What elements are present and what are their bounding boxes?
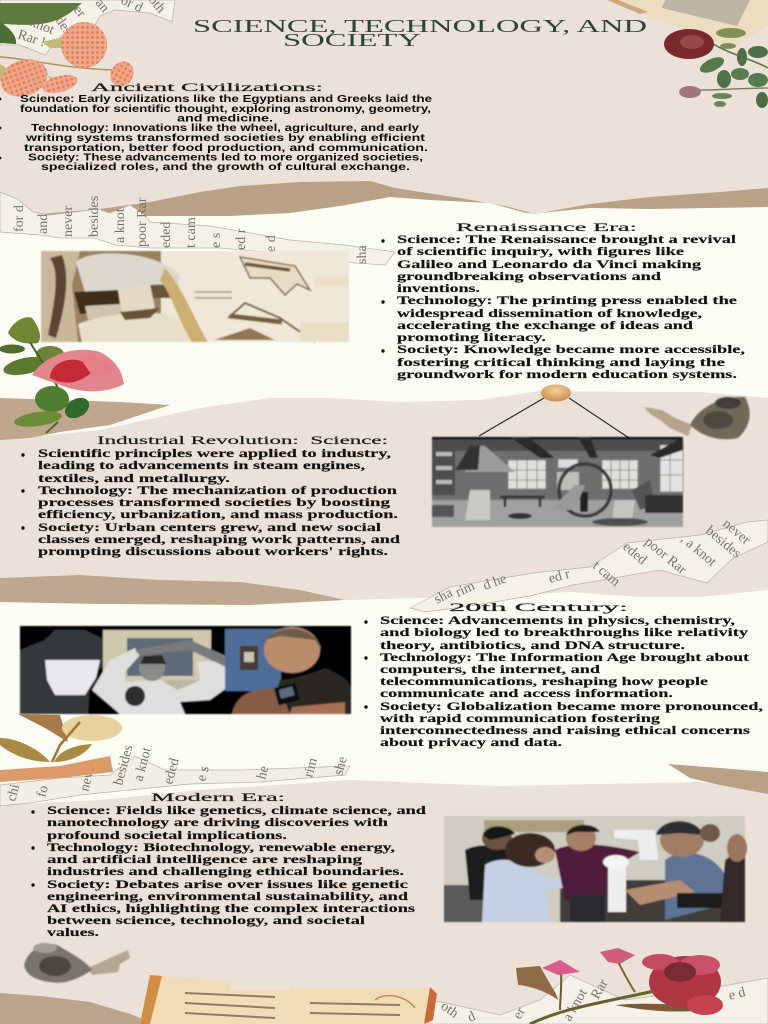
text block: Modern Era: engineering, environmental sustainability, and (47, 891, 409, 903)
newspaper strip: bottom right: e d (727, 985, 747, 1004)
text block: Renaissance Era: promoting literacy. (397, 332, 546, 344)
text block: Ancient Civilizations: foundation for scientific thought, exploring astronomy, geometry, (20, 104, 431, 115)
text block: Ancient Civilizations: Technology: Innovations like the wheel, agriculture, and early (31, 123, 420, 134)
text block: Modern Era: Society: Debates arise over issues like genetic (47, 879, 408, 891)
icon: rose with leaves (0, 317, 124, 433)
section: Industrial Revolution (21, 435, 401, 558)
text block: Renaissance Era (381, 234, 745, 381)
icon: dried flower with orange tape (0, 714, 122, 782)
newspaper strip: bottom right (345, 975, 768, 1024)
newspaper strip: under Ancient Civilizations: a knot (113, 208, 128, 243)
text block: Renaissance Era: Technology: The printing press enabled the (397, 295, 737, 307)
heading: Industrial Revolution: Industrial Revolution: Science: (97, 435, 388, 447)
text block: Modern Era: and artificial intelligence are reshaping (47, 854, 362, 866)
newspaper strip: above 20th Century: t cam (589, 559, 623, 590)
text block: Modern Era: between science, technology, and societal (47, 915, 365, 927)
text block: Renaissance Era: Society: Knowledge became more accessible, (397, 344, 745, 356)
text block: 20th Century: Science: Advancements in physics, chemistry, (380, 615, 735, 627)
text block: Renaissance Era: fostering critical thinking and laying the (397, 357, 725, 369)
text block: Industrial Revolution: Scientific principles were applied to industry, (38, 448, 391, 460)
icon: old open book bottom (140, 975, 437, 1024)
text block: Modern Era: nanotechnology are driving discoveries with (47, 817, 389, 829)
text block: Modern Era: Science: Fields like genetics, climate science, and (47, 805, 427, 817)
newspaper strip: bottom right: er (510, 1005, 529, 1022)
text block: Industrial Revolution: prompting discussions about workers' rights. (38, 546, 388, 558)
panel background: brown torn strip, Industrial (0, 398, 170, 440)
text block: Industrial Revolution: processes transformed societies by boosting (38, 497, 390, 509)
text block: Renaissance Era: accelerating the exchange of ideas and (397, 320, 694, 332)
text block: Modern Era: Technology: Biotechnology, renewable energy, (47, 842, 395, 854)
newspaper strip: above Modern Era (0, 743, 351, 806)
newspaper strip: above Modern Era: eded (161, 757, 183, 786)
text block: Renaissance Era: inventions. (397, 283, 480, 295)
newspaper strip: above Modern Era: fo (34, 784, 52, 799)
icon: top left orange flowers and leaves (0, 3, 138, 103)
text block: Industrial Revolution: textiles, and metallurgy. (38, 473, 230, 485)
icon: top right rose with leaves (664, 28, 768, 108)
newspaper strip: above Modern Era: she (331, 755, 351, 777)
newspaper strip: under Ancient Civilizations: for d (12, 205, 27, 232)
newspaper strip: under Ancient Civilizations: never (61, 206, 76, 237)
text block: Renaissance Era: groundbreaking observations and (397, 271, 662, 283)
bottom brown strip (0, 993, 155, 1024)
text block: Renaissance Era: of scientific inquiry, with figures like (397, 246, 684, 258)
image: 20th century technology collage (20, 626, 351, 714)
image: Leonardo da Vinci portrait and sketches (41, 251, 349, 342)
newspaper strip: above Modern Era: rim (301, 756, 321, 779)
text block: Industrial Revolution: leading to advancements in steam engines, (38, 460, 365, 472)
newspaper strip: under Ancient Civilizations: sha (355, 245, 370, 264)
newspaper strip: above 20th Century: poor Rar (641, 535, 689, 578)
text block: Industrial Revolution: Technology: The mechanization of production (38, 485, 398, 497)
text block: Modern Era: industries and challenging ethical boundaries. (47, 866, 404, 878)
image: modern robotics lab photo (444, 816, 747, 922)
text block: 20th Century: with rapid communication fostering (380, 713, 660, 725)
text block: 20th Century: and biology led to breakthroughs like relativity (380, 627, 748, 639)
newspaper strip: above Modern Era: e s (194, 764, 213, 783)
newspaper strip: above 20th Century: sha (432, 585, 456, 608)
heading: Ancient Civilizations: Ancient Civilizations: (91, 82, 323, 94)
newspaper strip: under Ancient Civilizations: besides (87, 196, 102, 237)
text block: Industrial Revolution: Society: Urban centers grew, and new social (38, 522, 381, 534)
text block: Renaissance Era: widespread dissemination of knowledge, (397, 308, 702, 320)
text block: 20th Century (364, 615, 763, 749)
newspaper strip: under Ancient Civilizations (0, 192, 395, 265)
text block: Renaissance Era: Science: The Renaissance brought a revival (397, 234, 736, 246)
section: Ancient Civilizations (0, 82, 433, 173)
newspaper strip: under Ancient Civilizations: t cam (184, 217, 199, 248)
newspaper strip: top left: Rar ! (16, 28, 47, 51)
icon: moth top right (644, 397, 750, 439)
text block: 20th Century: telecommunications, reshaping how people (380, 676, 708, 688)
newspaper strip: above 20th Century: besides (702, 524, 744, 562)
text block: Ancient Civilizations: writing systems transformed societies by enabling efficient (25, 133, 426, 144)
newspaper strip: under Ancient Civilizations: e d (264, 235, 279, 252)
heading: Modern Era: Modern Era: (151, 792, 285, 804)
text block: Renaissance Era: groundwork for modern education systems. (397, 369, 737, 381)
newspaper strip: top left (0, 0, 175, 55)
title: SOCIETY (283, 30, 421, 50)
newspaper strip: under Ancient Civilizations: eded (159, 222, 174, 248)
title: SCIENCE, TECHNOLOGY, AND (193, 16, 647, 36)
newspaper strip: under Ancient Civilizations: e s (209, 233, 224, 248)
icon: dried pink flower bottom right (516, 948, 723, 1024)
newspaper strip: above 20th Century: never (719, 517, 753, 548)
text block: Industrial Revolution (21, 448, 401, 558)
text block: 20th Century: theory, antibiotics, and DNA structure. (380, 640, 685, 652)
newspaper strip: top left: er (70, 3, 89, 21)
newspaper strip: bottom right: Rar (588, 977, 612, 1002)
icon: bead with hanging strings (479, 384, 629, 438)
text block: Modern Era (31, 805, 427, 939)
panel background: white torn paper, Renaissance (0, 181, 768, 440)
newspaper strip: above Modern Era: a knot (131, 746, 155, 783)
newspaper strip: above 20th Century: d he (481, 572, 509, 594)
text block: Ancient Civilizations: and medicine. (177, 114, 273, 124)
text block: Renaissance Era: Galileo and Leonardo da Vinci making (397, 259, 701, 271)
heading: 20th Century: 20th Century: (449, 602, 628, 614)
text block: Ancient Civilizations: specialized roles, and the growth of cultural exchange. (41, 162, 410, 173)
newspaper strip: above Modern Era: chi (4, 783, 23, 803)
newspaper strip: above Modern Era: never (77, 759, 100, 793)
newspaper strip: above Modern Era: he (254, 764, 272, 781)
text block: 20th Century: Technology: The Information Age brought about (380, 652, 749, 664)
text block: Ancient Civilizations: Science: Early civilizations like the Egyptians and Greeks laid the (20, 94, 433, 105)
text block: 20th Century: communicate and access information. (380, 688, 673, 700)
heading: Renaissance Era: Renaissance Era: (456, 222, 637, 234)
newspaper strip: bottom right: a knot (560, 986, 591, 1024)
panel background: white torn paper, 20th Century (0, 575, 768, 805)
newspaper strip: above 20th Century: rim (453, 579, 477, 601)
text block: Ancient Civilizations: transportation, better food production, and communication. (24, 143, 428, 154)
newspaper strip: above Modern Era: besides (111, 743, 137, 787)
section: 20th Century (364, 602, 763, 749)
text block: 20th Century: computers, the internet, and (380, 664, 601, 676)
newspaper strip: bottom right: oth (438, 999, 461, 1022)
newspaper strip: under Ancient Civilizations: poor Rar (135, 197, 150, 247)
newspaper strip: under Ancient Civilizations: and (36, 214, 51, 234)
newspaper strip: top left: des (52, 14, 75, 38)
text block: Modern Era: values. (47, 927, 99, 939)
text block: Industrial Revolution: efficiency, urbanization, and mass production. (38, 509, 398, 521)
newspaper strip: above 20th Century: eded (619, 540, 649, 568)
text block: 20th Century: Society: Globalization became more pronounced, (380, 701, 763, 713)
newspaper strip: above 20th Century: , a knot (677, 532, 719, 570)
section: Renaissance Era (381, 222, 745, 381)
text block: Ancient Civilizations: Society: These advancements led to more organized societies, (28, 152, 423, 164)
newspaper strip: above 20th Century: ed r (547, 567, 572, 587)
image: industrial workshop engraving (432, 437, 683, 527)
icon: moth bottom left (24, 943, 130, 983)
text block: Modern Era: profound societal implications. (47, 830, 287, 842)
text block: Modern Era: AI ethics, highlighting the complex interactions (47, 903, 416, 915)
text block: Ancient Civilizations (0, 94, 433, 173)
text block: 20th Century: about privacy and data. (380, 737, 562, 749)
icon: top right open book (607, 0, 768, 48)
title (193, 16, 647, 50)
newspaper strip: top left: knot (28, 15, 56, 38)
text block: Industrial Revolution: classes emerged, reshaping work patterns, and (38, 534, 401, 546)
section: Modern Era (31, 792, 427, 939)
text block: 20th Century: interconnectedness and raising ethical concerns (380, 725, 751, 737)
newspaper strip: above 20th Century (410, 517, 768, 612)
newspaper strip: under Ancient Civilizations: ed r (234, 228, 249, 250)
